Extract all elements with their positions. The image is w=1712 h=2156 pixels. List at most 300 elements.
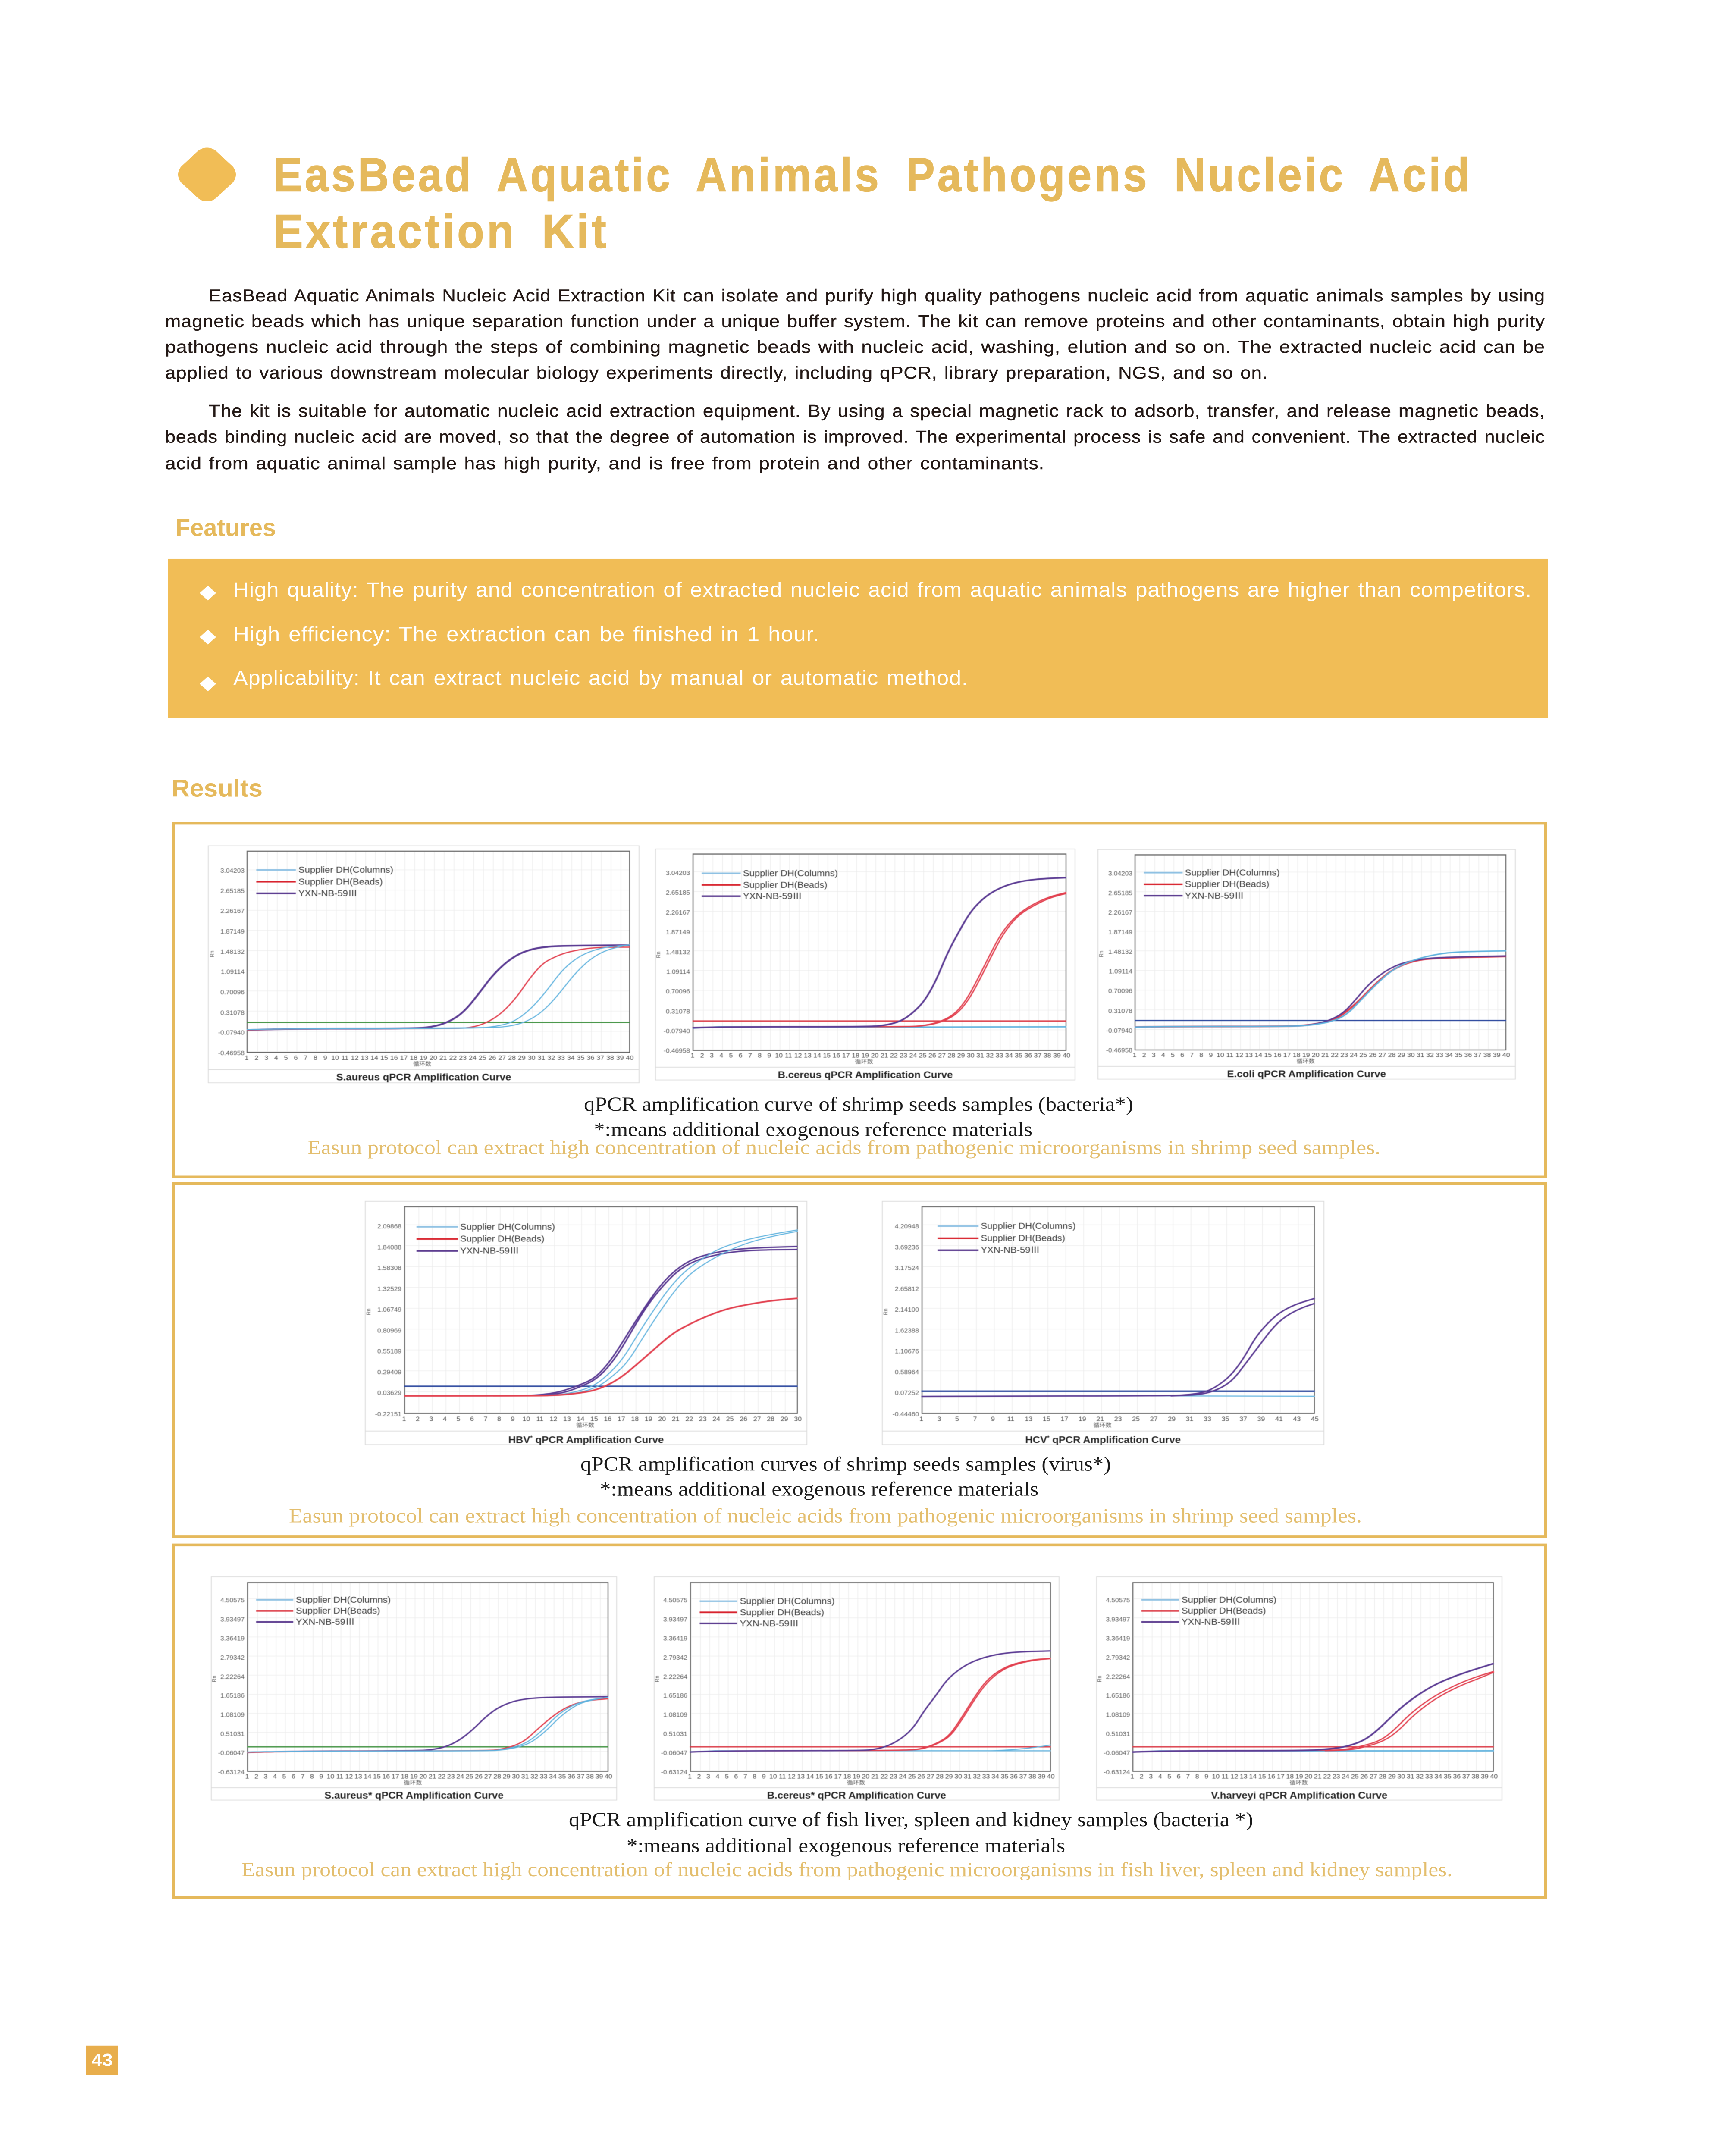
chart: S.aureus qPCR amplification curve: 循环数 — [413, 1061, 431, 1067]
caption: shrimp seeds bacteria: qPCR amplification curve of shrimp seeds samples (bacteria*) — [584, 1093, 1133, 1115]
chart: V.harveyi qPCR amplification curve: 2 — [1140, 1774, 1144, 1780]
chart: HBV qPCR amplification curve: 6 — [470, 1416, 474, 1423]
chart: B.cereus qPCR amplification curve: 7 — [748, 1053, 752, 1059]
chart: S.aureus qPCR amplification curve: 24 — [469, 1055, 477, 1062]
chart: HBV qPCR amplification curve: 0.03629 — [377, 1390, 401, 1397]
chart: HCV qPCR amplification curve: 2.65812 — [895, 1286, 919, 1293]
chart: HCV qPCR amplification curve: 15 — [1043, 1416, 1050, 1423]
chart: V.harveyi qPCR amplification curve: 39 — [1481, 1774, 1489, 1780]
captions: panel 1 — [172, 822, 1547, 1178]
chart: E.coli qPCR amplification curve: 8 — [1199, 1052, 1203, 1059]
chart: S.aureus* qPCR amplification curve: 14 — [364, 1774, 371, 1780]
title: Extraction Kit — [273, 205, 609, 258]
chart: S.aureus qPCR amplification curve: 3 — [264, 1055, 268, 1062]
chart: S.aureus* qPCR amplification curve: 4 — [273, 1774, 277, 1780]
chart: B.cereus* qPCR amplification curve: 4 — [715, 1774, 719, 1780]
captions: panel 2 — [172, 1182, 1547, 1538]
feature text: high efficiency: High efficiency: The extraction can be finished in 1 hour. — [233, 623, 819, 646]
chart: B.cereus* qPCR amplification curve: B.cereus* qPCR Amplification Curve — [767, 1790, 946, 1801]
chart: B.cereus qPCR amplification curve: 40 — [1063, 1053, 1070, 1059]
chart: B.cereus qPCR amplification curve: 29 — [957, 1053, 965, 1059]
chart: B.cereus qPCR amplification curve: 11 — [785, 1053, 792, 1059]
chart: V.harveyi qPCR amplification curve — [1096, 1576, 1502, 1801]
chart: B.cereus qPCR amplification curve: 34 — [1005, 1053, 1013, 1059]
caption: fish tissue bacteria: qPCR amplification curve of fish liver, spleen and kidney samples (bacteria *) — [569, 1808, 1253, 1830]
chart: S.aureus* qPCR amplification curve: 2.22264 — [220, 1673, 245, 1680]
chart: HBV qPCR amplification curve: 26 — [740, 1416, 747, 1423]
chart: S.aureus* qPCR amplification curve: 2.79342 — [220, 1655, 245, 1661]
chart: HBV qPCR amplification curve: 1.32529 — [377, 1286, 401, 1293]
chart: S.aureus* qPCR amplification curve: 12 — [345, 1774, 353, 1780]
chart: V.harveyi qPCR amplification curve: 30 — [1397, 1774, 1405, 1780]
chart: E.coli qPCR amplification curve: 35 — [1455, 1052, 1462, 1059]
chart: S.aureus* qPCR amplification curve: 0.51031 — [220, 1731, 245, 1738]
chart: HCV qPCR amplification curve: 1.62388 — [895, 1328, 919, 1334]
chart: B.cereus qPCR amplification curve: 20 — [871, 1053, 878, 1059]
chart: V.harveyi qPCR amplification curve: 40 — [1490, 1774, 1498, 1780]
chart: B.cereus* qPCR amplification curve: 循环数 — [847, 1779, 865, 1786]
chart: S.aureus* qPCR amplification curve — [211, 1576, 617, 1801]
chart: B.cereus* qPCR amplification curve: 1.65186 — [663, 1692, 687, 1699]
chart: HCV qPCR amplification curve: 19 — [1079, 1416, 1086, 1423]
chart: E.coli qPCR amplification curve: 17 — [1283, 1052, 1291, 1059]
note: exogenous reference materials: *:means additional exogenous reference materials — [600, 1477, 1038, 1500]
chart: B.cereus* qPCR amplification curve: 25 — [908, 1774, 916, 1780]
chart: B.cereus qPCR amplification curve: 4 — [719, 1053, 723, 1059]
header and features section — [0, 0, 1712, 817]
chart: HBV qPCR amplification curve: 30 — [794, 1416, 802, 1423]
chart: S.aureus* qPCR amplification curve: 循环数 — [404, 1779, 422, 1786]
chart: HBV qPCR amplification curve: 循环数 — [576, 1422, 594, 1428]
chart: S.aureus qPCR amplification curve: 1.87149 — [220, 928, 245, 935]
chart: B.cereus* qPCR amplification curve — [654, 1576, 1060, 1801]
text block: introduction paragraph 1: magnetic beads which has unique separation function under a unique buffer system. The kit can remove proteins and other contaminants, obtain high purity — [165, 312, 1545, 331]
chart: V.harveyi qPCR amplification curve: Rn — [1096, 1676, 1103, 1682]
conclusion: fish liver, spleen and kidney samples: Easun protocol can extract high concentration of nucleic acids from pathogenic microorganisms in fish liver, spleen and kidney samples. — [241, 1858, 1452, 1880]
chart: B.cereus* qPCR amplification curve: 20 — [862, 1774, 869, 1780]
chart: B.cereus* qPCR amplification curve: 0.51031 — [663, 1731, 687, 1738]
chart: B.cereus qPCR amplification curve: 24 — [909, 1053, 917, 1059]
chart: S.aureus qPCR amplification curve: 13 — [361, 1055, 368, 1062]
chart: E.coli qPCR amplification curve: 20 — [1312, 1052, 1320, 1059]
chart: S.aureus qPCR amplification curve: 1.09114 — [221, 969, 245, 976]
chart: V.harveyi qPCR amplification curve: 22 — [1323, 1774, 1331, 1780]
chart: V.harveyi qPCR amplification curve: 36 — [1453, 1774, 1461, 1780]
caption: shrimp seeds virus: qPCR amplification curves of shrimp seeds samples (virus*) — [580, 1453, 1111, 1475]
chart: E.coli qPCR amplification curve: 12 — [1235, 1052, 1243, 1059]
text block: introduction paragraph 2: The kit is suitable for automatic nucleic acid extraction equipment. By using a special magnetic rack to adsorb, transfer, and release magnetic beads, — [209, 401, 1545, 421]
chart: E.coli qPCR amplification curve: 0.31078 — [1108, 1008, 1132, 1015]
chart: S.aureus* qPCR amplification curve: 26 — [475, 1774, 483, 1780]
chart: S.aureus qPCR amplification curve: 0.70096 — [220, 989, 245, 996]
chart: E.coli qPCR amplification curve: Supplier DH(Beads) — [1185, 879, 1269, 889]
chart: B.cereus* qPCR amplification curve: 35 — [1001, 1774, 1008, 1780]
chart: S.aureus qPCR amplification curve: 21 — [439, 1055, 447, 1062]
chart: E.coli qPCR amplification curve: 4 — [1161, 1052, 1165, 1059]
chart: V.harveyi qPCR amplification curve: 17 — [1277, 1774, 1285, 1780]
chart: V.harveyi qPCR amplification curve: 4.50575 — [1106, 1597, 1130, 1604]
chart: B.cereus qPCR amplification curve: 0.31078 — [666, 1008, 690, 1015]
chart: V.harveyi qPCR amplification curve: -0.06047 — [1104, 1750, 1130, 1757]
chart: E.coli qPCR amplification curve: 29 — [1398, 1052, 1405, 1059]
chart: HCV qPCR amplification curve: 3 — [938, 1416, 941, 1423]
chart: S.aureus* qPCR amplification curve: 21 — [429, 1774, 436, 1780]
panel: shrimp seeds virus results — [172, 1182, 1547, 1538]
chart: E.coli qPCR amplification curve: 7 — [1190, 1052, 1194, 1059]
chart: S.aureus qPCR amplification curve: Supplier DH(Beads) — [298, 877, 383, 887]
chart: HCV qPCR amplification curve: 27 — [1150, 1416, 1158, 1423]
chart: E.coli qPCR amplification curve: 32 — [1426, 1052, 1434, 1059]
chart: HBV qPCR amplification curve: 23 — [699, 1416, 707, 1423]
chart: B.cereus* qPCR amplification curve: 30 — [954, 1774, 962, 1780]
chart: S.aureus* qPCR amplification curve: Rn — [211, 1676, 217, 1682]
chart: S.aureus* qPCR amplification curve: 1.65186 — [220, 1692, 245, 1699]
chart: B.cereus* qPCR amplification curve: 14 — [806, 1774, 814, 1780]
chart: S.aureus qPCR amplification curve: 23 — [459, 1055, 467, 1062]
chart: E.coli qPCR amplification curve: 34 — [1445, 1052, 1453, 1059]
chart: B.cereus qPCR amplification curve: 1.09114 — [666, 968, 690, 975]
chart: V.harveyi qPCR amplification curve: 9 — [1204, 1774, 1208, 1780]
feature text: applicability: Applicability: It can extract nucleic acid by manual or automatic method. — [233, 667, 968, 690]
chart: HCV qPCR amplification curve: 9 — [991, 1416, 995, 1423]
chart: HBV qPCR amplification curve: 27 — [753, 1416, 761, 1423]
chart: S.aureus* qPCR amplification curve: S.aureus* qPCR Amplification Curve — [324, 1790, 504, 1801]
title: EasBead Aquatic Animals Pathogens Nucleic Acid — [273, 148, 1472, 202]
title — [273, 148, 1472, 258]
chart: B.cereus* qPCR amplification curve: 24 — [899, 1774, 906, 1780]
chart: B.cereus qPCR amplification curve: 32 — [986, 1053, 994, 1059]
chart: B.cereus* qPCR amplification curve: -0.06047 — [661, 1750, 687, 1757]
chart: V.harveyi qPCR amplification curve: 28 — [1379, 1774, 1386, 1780]
chart: V.harveyi qPCR amplification curve: YXN-NB-59Ⅲ — [1182, 1617, 1241, 1627]
chart: S.aureus qPCR amplification curve: 28 — [508, 1055, 516, 1062]
chart: B.cereus qPCR amplification curve: Rn — [655, 951, 662, 958]
chart: S.aureus* qPCR amplification curve: 4.50575 — [220, 1597, 245, 1604]
chart: HCV qPCR amplification curve: 2.14100 — [895, 1307, 919, 1313]
chart: B.cereus* qPCR amplification curve: 32 — [973, 1774, 981, 1780]
chart: B.cereus qPCR amplification curve: 38 — [1044, 1053, 1051, 1059]
note: exogenous reference materials: *:means additional exogenous reference materials — [594, 1118, 1032, 1141]
chart: HCV qPCR amplification curve: 33 — [1204, 1416, 1211, 1423]
conclusion: shrimp seed samples: Easun protocol can extract high concentration of nucleic acids from pathogenic microorganisms in shrimp seed samples. — [289, 1504, 1362, 1527]
text block: introduction paragraph 1 — [165, 286, 1545, 382]
chart: HBV qPCR amplification curve: Rn — [365, 1308, 372, 1315]
chart: HCV qPCR amplification curve: 11 — [1007, 1416, 1014, 1423]
chart: B.cereus qPCR amplification curve: 31 — [976, 1053, 984, 1059]
chart: HCV qPCR amplification curve: Supplier DH(Columns) — [981, 1221, 1076, 1231]
chart: B.cereus* qPCR amplification curve: 1 — [688, 1774, 692, 1780]
chart: B.cereus* qPCR amplification curve: 34 — [991, 1774, 999, 1780]
chart: B.cereus* qPCR amplification curve: Supplier DH(Columns) — [740, 1596, 835, 1606]
chart: S.aureus qPCR amplification curve: 25 — [479, 1055, 486, 1062]
chart: S.aureus* qPCR amplification curve: 33 — [540, 1774, 547, 1780]
chart: S.aureus qPCR amplification curve: 39 — [616, 1055, 624, 1062]
chart: E.coli qPCR amplification curve: 22 — [1331, 1052, 1339, 1059]
chart: HBV qPCR amplification curve: 2 — [416, 1416, 420, 1423]
chart: E.coli qPCR amplification curve: 1.09114 — [1109, 968, 1132, 975]
chart: V.harveyi qPCR amplification curve: 2.22264 — [1106, 1673, 1130, 1680]
icon: bullet diamond 1 — [200, 586, 216, 600]
chart: B.cereus qPCR amplification curve: 15 — [823, 1053, 831, 1059]
chart: B.cereus* qPCR amplification curve: 11 — [779, 1774, 786, 1780]
chart: S.aureus* qPCR amplification curve: 16 — [382, 1774, 390, 1780]
chart: HCV qPCR amplification curve: 23 — [1114, 1416, 1122, 1423]
chart: S.aureus* qPCR amplification curve: 1.08109 — [220, 1711, 245, 1718]
chart: B.cereus qPCR amplification curve: 2.26167 — [666, 909, 690, 916]
page number — [86, 2046, 118, 2075]
chart: S.aureus qPCR amplification curve: 31 — [538, 1055, 545, 1062]
chart: S.aureus* qPCR amplification curve: 23 — [447, 1774, 455, 1780]
chart: S.aureus qPCR amplification curve: 27 — [498, 1055, 506, 1062]
chart: HCV qPCR amplification curve: 25 — [1132, 1416, 1140, 1423]
chart: B.cereus qPCR amplification curve: 12 — [794, 1053, 802, 1059]
chart: S.aureus* qPCR amplification curve: 25 — [466, 1774, 473, 1780]
chart: E.coli qPCR amplification curve: 31 — [1417, 1052, 1424, 1059]
chart: B.cereus qPCR amplification curve: 13 — [804, 1053, 812, 1059]
chart: B.cereus qPCR amplification curve: 1.87149 — [666, 929, 690, 936]
chart: E.coli qPCR amplification curve: 10 — [1217, 1052, 1224, 1059]
chart: B.cereus qPCR amplification curve: 3 — [710, 1053, 714, 1059]
chart: B.cereus* qPCR amplification curve: Rn — [654, 1676, 660, 1682]
chart: B.cereus* qPCR amplification curve: 2.79342 — [663, 1655, 687, 1661]
chart: B.cereus qPCR amplification curve: 22 — [890, 1053, 898, 1059]
chart: S.aureus* qPCR amplification curve: 20 — [419, 1774, 427, 1780]
chart: V.harveyi qPCR amplification curve: 15 — [1258, 1774, 1266, 1780]
text block: introduction paragraph 1: applied to various downstream molecular biology experiments directly, including qPCR, library preparation, NGS, and so on. — [165, 364, 1268, 382]
chart: S.aureus* qPCR amplification curve: 37 — [577, 1774, 584, 1780]
chart: HCV qPCR amplification curve: Rn — [882, 1308, 889, 1315]
chart: S.aureus* qPCR amplification curve: 3 — [264, 1774, 267, 1780]
chart: S.aureus qPCR amplification curve: 9 — [323, 1055, 327, 1062]
feature text: high quality: High quality: The purity and concentration of extracted nucleic acid from aquatic animals pathogens are higher than competitors. — [233, 578, 1532, 602]
icon: bullet diamond 2 — [200, 630, 216, 645]
chart: B.cereus qPCR amplification curve: 18 — [852, 1053, 859, 1059]
chart: V.harveyi qPCR amplification curve: 21 — [1314, 1774, 1322, 1780]
chart: HBV qPCR amplification curve: -0.22151 — [375, 1411, 401, 1418]
chart: E.coli qPCR amplification curve: 24 — [1350, 1052, 1358, 1059]
chart: S.aureus* qPCR amplification curve: -0.63124 — [218, 1769, 245, 1776]
chart: B.cereus* qPCR amplification curve: 39 — [1038, 1774, 1045, 1780]
chart: S.aureus* qPCR amplification curve: 7 — [301, 1774, 304, 1780]
chart: E.coli qPCR amplification curve: 33 — [1436, 1052, 1443, 1059]
chart: B.cereus* qPCR amplification curve: 27 — [927, 1774, 934, 1780]
chart: HBV qPCR amplification curve: YXN-NB-59Ⅲ — [460, 1246, 519, 1256]
chart: S.aureus qPCR amplification curve: -0.46958 — [218, 1050, 245, 1057]
chart: E.coli qPCR amplification curve: 37 — [1474, 1052, 1481, 1059]
chart: S.aureus* qPCR amplification curve: 36 — [568, 1774, 575, 1780]
chart: HBV qPCR amplification curve: 18 — [631, 1416, 639, 1423]
chart: V.harveyi qPCR amplification curve: 循环数 — [1289, 1779, 1308, 1786]
chart: S.aureus* qPCR amplification curve: 2 — [254, 1774, 258, 1780]
chart: S.aureus* qPCR amplification curve: Supplier DH(Beads) — [296, 1606, 380, 1616]
chart: V.harveyi qPCR amplification curve: 7 — [1186, 1774, 1190, 1780]
chart: B.cereus qPCR amplification curve: -0.07940 — [664, 1028, 690, 1035]
chart: B.cereus qPCR amplification curve: 39 — [1053, 1053, 1061, 1059]
chart: S.aureus* qPCR amplification curve: 10 — [327, 1774, 334, 1780]
conclusion: shrimp seed samples: Easun protocol can extract high concentration of nucleic acids from pathogenic microorganisms in shrimp seed samples. — [307, 1136, 1380, 1159]
chart: HBV qPCR amplification curve: 1.84088 — [377, 1244, 401, 1251]
chart: HCV qPCR amplification curve: 39 — [1257, 1416, 1265, 1423]
chart: V.harveyi qPCR amplification curve: 24 — [1342, 1774, 1349, 1780]
chart: B.cereus* qPCR amplification curve: 3.93497 — [663, 1616, 687, 1623]
chart: V.harveyi qPCR amplification curve: Supplier DH(Beads) — [1182, 1606, 1266, 1616]
chart: S.aureus qPCR amplification curve: 6 — [294, 1055, 298, 1062]
chart: V.harveyi qPCR amplification curve: 25 — [1351, 1774, 1359, 1780]
chart: B.cereus qPCR amplification curve: 19 — [861, 1053, 869, 1059]
text block: introduction paragraph 2 — [165, 401, 1545, 473]
chart: HCV qPCR amplification curve: 1.10676 — [895, 1348, 919, 1355]
chart: B.cereus qPCR amplification curve: 5 — [729, 1053, 733, 1059]
chart: V.harveyi qPCR amplification curve: 4 — [1158, 1774, 1162, 1780]
chart: S.aureus* qPCR amplification curve: 11 — [336, 1774, 343, 1780]
chart: B.cereus* qPCR amplification curve: -0.63124 — [661, 1769, 687, 1776]
chart: HBV qPCR amplification curve: 24 — [712, 1416, 720, 1423]
chart: HCV qPCR amplification curve: 0.58964 — [895, 1369, 919, 1376]
chart: S.aureus qPCR amplification curve: 14 — [370, 1055, 378, 1062]
text block: introduction paragraph 1: EasBead Aquatic Animals Nucleic Acid Extraction Kit can isolate and purify high quality pathogens nucleic acid from aquatic animals samples by using — [209, 286, 1545, 305]
chart: S.aureus* qPCR amplification curve: 17 — [392, 1774, 399, 1780]
icon: rounded diamond — [191, 160, 223, 189]
chart: E.coli qPCR amplification curve: 1.87149 — [1108, 929, 1132, 936]
chart: S.aureus qPCR amplification curve: 35 — [577, 1055, 584, 1062]
chart: B.cereus qPCR amplification curve: Supplier DH(Beads) — [743, 880, 828, 890]
chart: S.aureus qPCR amplification curve: 1.48132 — [220, 949, 245, 956]
chart: B.cereus* qPCR amplification curve: 40 — [1047, 1774, 1055, 1780]
chart: E.coli qPCR amplification curve: 38 — [1483, 1052, 1491, 1059]
chart: B.cereus* qPCR amplification curve: 3 — [706, 1774, 710, 1780]
chart: HBV qPCR amplification curve: 1.06749 — [377, 1307, 401, 1313]
chart: B.cereus qPCR amplification curve: 23 — [900, 1053, 907, 1059]
chart: HBV qPCR amplification curve: 16 — [604, 1416, 611, 1423]
chart: V.harveyi qPCR amplification curve: 29 — [1388, 1774, 1396, 1780]
chart: B.cereus* qPCR amplification curve: 3.36419 — [663, 1636, 687, 1642]
chart: B.cereus qPCR amplification curve: 28 — [947, 1053, 955, 1059]
chart: B.cereus* qPCR amplification curve: 15 — [815, 1774, 823, 1780]
chart: B.cereus qPCR amplification curve: Supplier DH(Columns) — [743, 868, 838, 878]
chart: HBV qPCR amplification curve: 5 — [457, 1416, 460, 1423]
chart: HCV qPCR amplification curve: 43 — [1293, 1416, 1301, 1423]
chart: E.coli qPCR amplification curve: 2 — [1142, 1052, 1146, 1059]
chart: B.cereus* qPCR amplification curve: Supplier DH(Beads) — [740, 1607, 824, 1617]
chart: HCV qPCR amplification curve: 1 — [919, 1416, 923, 1423]
chart: V.harveyi qPCR amplification curve: 13 — [1240, 1774, 1248, 1780]
chart: B.cereus qPCR amplification curve: 2.65185 — [666, 890, 690, 896]
chart: S.aureus qPCR amplification curve: 15 — [380, 1055, 388, 1062]
chart: S.aureus* qPCR amplification curve: 31 — [521, 1774, 529, 1780]
chart: V.harveyi qPCR amplification curve: Supplier DH(Columns) — [1182, 1595, 1276, 1604]
chart: V.harveyi qPCR amplification curve: V.harveyi qPCR Amplification Curve — [1211, 1790, 1387, 1801]
chart: S.aureus* qPCR amplification curve: 13 — [354, 1774, 362, 1780]
chart: V.harveyi qPCR amplification curve: 18 — [1286, 1774, 1294, 1780]
chart: B.cereus qPCR amplification curve: 33 — [996, 1053, 1003, 1059]
heading: Features: Features — [176, 514, 276, 541]
chart: V.harveyi qPCR amplification curve: 32 — [1416, 1774, 1424, 1780]
chart: B.cereus qPCR amplification curve: 3.04203 — [666, 870, 690, 877]
chart: HBV qPCR amplification curve: 11 — [536, 1416, 543, 1423]
chart: S.aureus qPCR amplification curve: 33 — [557, 1055, 565, 1062]
chart: V.harveyi qPCR amplification curve: 31 — [1407, 1774, 1414, 1780]
chart: S.aureus qPCR amplification curve: 37 — [596, 1055, 604, 1062]
chart: E.coli qPCR amplification curve: 15 — [1264, 1052, 1272, 1059]
chart: E.coli qPCR amplification curve: 13 — [1245, 1052, 1253, 1059]
chart: B.cereus* qPCR amplification curve: 18 — [843, 1774, 851, 1780]
chart: HBV qPCR amplification curve: 9 — [511, 1416, 514, 1423]
chart: B.cereus qPCR amplification curve: 35 — [1015, 1053, 1022, 1059]
chart: B.cereus qPCR amplification curve: 1.48132 — [666, 949, 690, 956]
chart: V.harveyi qPCR amplification curve: 2.79342 — [1106, 1655, 1130, 1661]
chart: B.cereus* qPCR amplification curve: 38 — [1028, 1774, 1036, 1780]
chart: S.aureus qPCR amplification curve: 26 — [489, 1055, 496, 1062]
chart: HBV qPCR amplification curve — [365, 1201, 807, 1445]
chart: HBV qPCR amplification curve: 17 — [618, 1416, 625, 1423]
chart: HCV qPCR amplification curve: 3.17524 — [895, 1265, 919, 1272]
chart: S.aureus qPCR amplification curve: 36 — [586, 1055, 594, 1062]
chart: V.harveyi qPCR amplification curve: 19 — [1295, 1774, 1303, 1780]
chart: B.cereus* qPCR amplification curve: 31 — [964, 1774, 971, 1780]
chart: HBV qPCR amplification curve: 20 — [658, 1416, 666, 1423]
chart: HBV qPCR amplification curve: 0.55189 — [377, 1348, 401, 1355]
chart: S.aureus* qPCR amplification curve: 9 — [319, 1774, 323, 1780]
chart: S.aureus qPCR amplification curve: 10 — [331, 1055, 339, 1062]
chart: HBV qPCR amplification curve: 0.80969 — [377, 1328, 401, 1334]
chart: V.harveyi qPCR amplification curve: 6 — [1177, 1774, 1181, 1780]
chart: B.cereus qPCR amplification curve: 0.70096 — [666, 988, 690, 995]
chart: S.aureus qPCR amplification curve: 18 — [410, 1055, 417, 1062]
chart: HCV qPCR amplification curve: 21 — [1096, 1416, 1104, 1423]
chart: S.aureus* qPCR amplification curve: -0.06047 — [218, 1750, 245, 1757]
chart: S.aureus qPCR amplification curve: 2 — [254, 1055, 258, 1062]
chart: V.harveyi qPCR amplification curve: 35 — [1444, 1774, 1452, 1780]
chart: V.harveyi qPCR amplification curve: 37 — [1462, 1774, 1470, 1780]
chart: S.aureus qPCR amplification curve: 40 — [626, 1055, 633, 1062]
chart: S.aureus qPCR amplification curve: Supplier DH(Columns) — [298, 865, 393, 874]
chart: B.cereus* qPCR amplification curve: 6 — [734, 1774, 738, 1780]
chart: HBV qPCR amplification curve: 0.29409 — [377, 1369, 401, 1376]
chart: S.aureus qPCR amplification curve: 22 — [449, 1055, 457, 1062]
chart: E.coli qPCR amplification curve: 40 — [1502, 1052, 1510, 1059]
chart: E.coli qPCR amplification curve: YXN-NB-59Ⅲ — [1185, 890, 1244, 900]
chart: S.aureus qPCR amplification curve: 5 — [284, 1055, 288, 1062]
chart: S.aureus qPCR amplification curve: 12 — [351, 1055, 358, 1062]
chart: V.harveyi qPCR amplification curve: 27 — [1370, 1774, 1377, 1780]
chart: HCV qPCR amplification curve: -0.44460 — [893, 1411, 919, 1418]
chart: S.aureus* qPCR amplification curve: 27 — [484, 1774, 492, 1780]
chart: HBV qPCR amplification curve: 1 — [402, 1416, 406, 1423]
chart: E.coli qPCR amplification curve: -0.07940 — [1106, 1028, 1132, 1034]
chart: B.cereus qPCR amplification curve: 16 — [833, 1053, 840, 1059]
chart: HCV qPCR amplification curve: 35 — [1222, 1416, 1229, 1423]
chart: S.aureus* qPCR amplification curve: 30 — [512, 1774, 520, 1780]
chart: HBV qPCR amplification curve: Supplier DH(Columns) — [460, 1222, 555, 1232]
chart: B.cereus* qPCR amplification curve: 17 — [834, 1774, 842, 1780]
chart: B.cereus* qPCR amplification curve: 4.50575 — [663, 1597, 687, 1604]
chart: V.harveyi qPCR amplification curve: 12 — [1230, 1774, 1238, 1780]
chart: HCV qPCR amplification curve: 7 — [973, 1416, 977, 1423]
chart: S.aureus* qPCR amplification curve: 28 — [493, 1774, 501, 1780]
chart: B.cereus qPCR amplification curve: 30 — [967, 1053, 975, 1059]
chart: HCV qPCR amplification curve — [881, 1201, 1324, 1445]
chart: B.cereus qPCR amplification curve: 14 — [813, 1053, 821, 1059]
chart: E.coli qPCR amplification curve: 2.26167 — [1108, 909, 1132, 916]
chart: HBV qPCR amplification curve: 2.09868 — [377, 1223, 401, 1230]
chart: S.aureus qPCR amplification curve: -0.07940 — [218, 1030, 245, 1037]
chart: E.coli qPCR amplification curve: Rn — [1098, 950, 1104, 957]
chart: E.coli qPCR amplification curve: 1 — [1133, 1052, 1137, 1059]
chart: E.coli qPCR amplification curve: -0.46958 — [1106, 1047, 1132, 1054]
chart: V.harveyi qPCR amplification curve: 26 — [1360, 1774, 1368, 1780]
chart: B.cereus qPCR amplification curve: -0.46958 — [664, 1048, 690, 1055]
chart: E.coli qPCR amplification curve: 19 — [1302, 1052, 1310, 1059]
